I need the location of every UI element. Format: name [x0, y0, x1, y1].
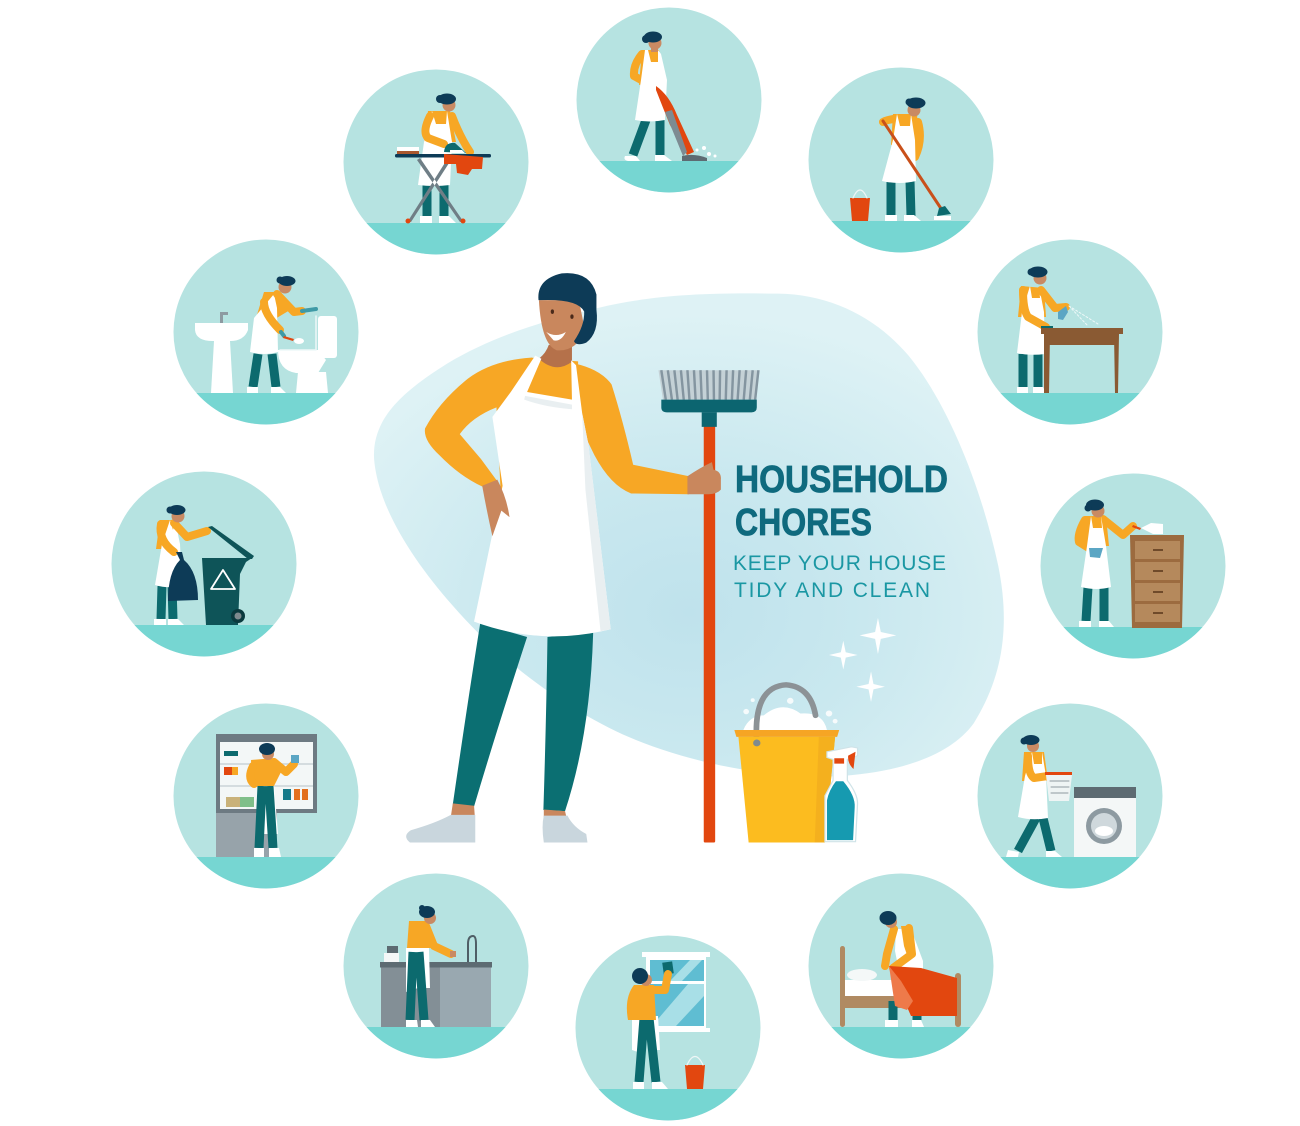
chore circle: mopping	[808, 68, 994, 252]
chore circle: spraying table	[978, 240, 1162, 424]
subtitle line two: TIDY AND CLEAN	[734, 579, 930, 602]
chore circle: washing dishes	[344, 874, 528, 1058]
apron	[474, 356, 611, 636]
background blob	[374, 293, 1004, 777]
window	[642, 952, 710, 1032]
sweater and arms	[425, 358, 689, 494]
chore circle: ironing	[344, 70, 528, 254]
chore circle: cleaning window	[576, 936, 760, 1120]
fridge	[216, 734, 317, 857]
broom	[658, 370, 760, 842]
neck and head	[538, 273, 597, 367]
chore circle: laundry	[978, 704, 1162, 888]
sink	[195, 312, 248, 393]
chore circle: dusting drawers	[1040, 474, 1226, 658]
subtitle line one: KEEP YOUR HOUSE	[733, 552, 946, 575]
title: HOUSEHOLD	[735, 459, 948, 501]
bed	[840, 946, 961, 1027]
bucket with foam	[734, 685, 839, 842]
hands	[482, 462, 721, 536]
kitchen counter	[380, 936, 492, 1027]
chore circle: vacuuming	[576, 8, 762, 192]
chore circle: cleaning toilet	[174, 240, 358, 424]
legs	[451, 624, 593, 818]
shoes	[406, 815, 587, 842]
washing machine	[1074, 787, 1136, 857]
spray bottle	[825, 747, 858, 842]
toilet	[278, 316, 337, 393]
chore circle: making the bed	[808, 874, 994, 1058]
panel: central illustration	[374, 273, 1004, 842]
sparkles	[829, 618, 896, 702]
chore circle: taking out trash	[112, 472, 296, 656]
man with broom	[406, 273, 760, 842]
title second line: CHORES	[735, 502, 872, 544]
chore circle: cleaning fridge	[174, 704, 358, 888]
